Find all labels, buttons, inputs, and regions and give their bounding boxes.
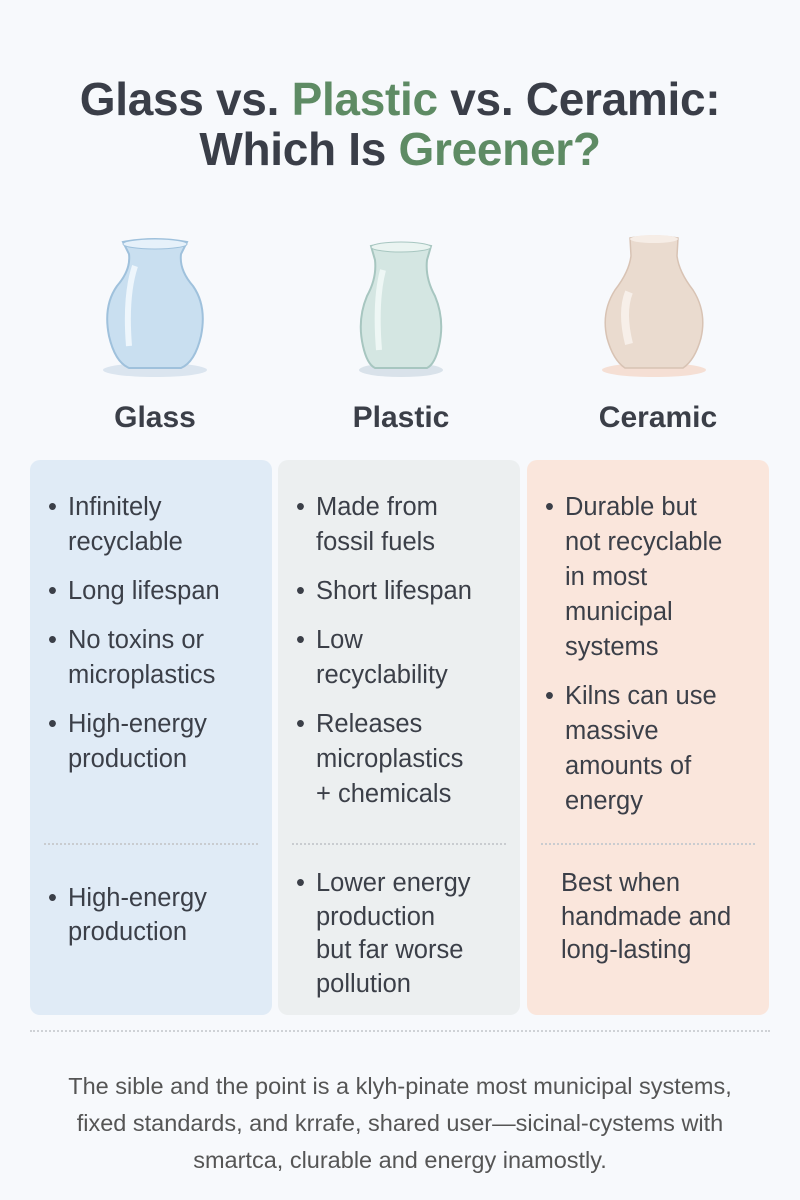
panel: plastic: fossil fuels — [316, 528, 435, 556]
heading: Glass: Glass — [114, 401, 196, 434]
panel: plastic: recyclability — [316, 661, 448, 689]
icon: ceramic vase — [602, 235, 706, 377]
panel: plastic: pollution — [316, 970, 411, 998]
panel: plastic: but far worse — [316, 936, 463, 964]
panel: ceramic: Kilns can use — [565, 682, 717, 710]
panel: ceramic: amounts of — [565, 752, 691, 780]
panel: ceramic: systems — [565, 633, 659, 661]
footer text — [68, 1073, 732, 1173]
panel: ceramic: long-lasting — [561, 936, 691, 964]
panel: ceramic: massive — [565, 717, 659, 745]
panel: plastic: production — [316, 902, 435, 930]
title: Which Is Greener? — [199, 123, 601, 175]
panel: plastic: + chemicals — [316, 780, 451, 808]
heading: Plastic: Plastic — [353, 401, 449, 434]
panel: plastic: Made from — [316, 493, 438, 521]
panel: plastic: Short lifespan — [316, 577, 472, 605]
panel: glass: Long lifespan — [68, 577, 220, 605]
heading: Ceramic: Ceramic — [599, 401, 717, 434]
panel: plastic — [278, 460, 520, 1015]
panel: ceramic: energy — [565, 787, 643, 815]
panel: glass: High-energy — [68, 884, 207, 912]
title — [80, 73, 720, 175]
footer text: smartca, clurable and energy inamostly. — [193, 1147, 607, 1173]
panel: ceramic — [527, 460, 769, 1015]
panel: ceramic: Durable but — [565, 493, 697, 521]
panel: glass: production — [68, 745, 187, 773]
panel: glass: microplastics — [68, 661, 215, 689]
panel: glass: Infinitely — [68, 493, 162, 521]
panel: ceramic: Best when — [561, 869, 680, 897]
panel: plastic: Lower energy — [316, 869, 471, 897]
panel: glass: High-energy — [68, 710, 207, 738]
panel: plastic: microplastics — [316, 745, 463, 773]
footer text: The sible and the point is a klyh-pinate most municipal systems, — [68, 1073, 732, 1099]
icon: glass vase — [103, 238, 207, 377]
panel: glass — [30, 460, 272, 1015]
panel: ceramic: handmade and — [561, 902, 731, 930]
icon: plastic vase — [359, 242, 443, 377]
footer text: fixed standards, and krrafe, shared user—sicinal-cystems with — [77, 1110, 723, 1136]
panel: ceramic: municipal — [565, 598, 673, 626]
panel: glass: No toxins or — [68, 626, 204, 654]
title: Glass vs. Plastic vs. Ceramic: — [80, 73, 720, 125]
panel: plastic: Releases — [316, 710, 422, 738]
panel: ceramic: not recyclable — [565, 528, 722, 556]
panel: plastic: Low — [316, 626, 363, 654]
panel: ceramic: in most — [565, 563, 647, 591]
panel: glass: production — [68, 918, 187, 946]
panel: glass: recyclable — [68, 528, 183, 556]
